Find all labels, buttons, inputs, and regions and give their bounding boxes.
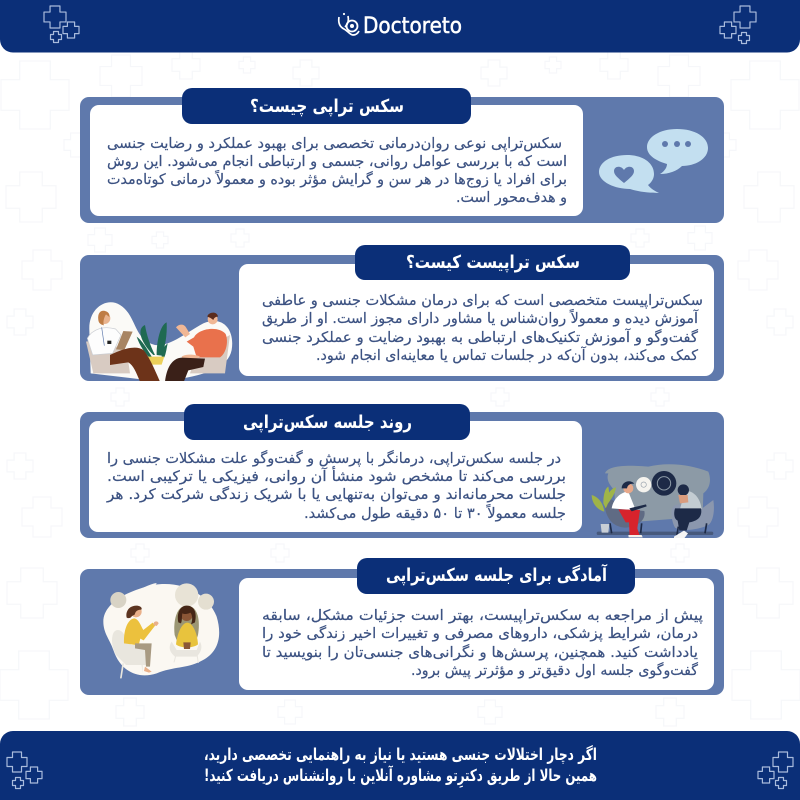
panel 1: what is sex therapy [80, 88, 724, 223]
footer call to action [204, 744, 597, 788]
text card [239, 578, 714, 690]
body text: سکس‌تراپی نوعی روان‌درمانی تخصصی برای بهبود عملکرد و رضایت جنسی [107, 136, 562, 152]
body text: یادداشت کنید. همچنین، پرسش‌ها و نگرانی‌های جنسی‌تان را بنویسید تا [262, 644, 698, 661]
illustration: worried client with therapist [592, 464, 714, 539]
icon: footer crosses left [7, 752, 42, 788]
icon: footer crosses right [758, 752, 793, 788]
body text [107, 136, 567, 206]
body text [262, 608, 703, 679]
icon: header crosses left [44, 6, 79, 42]
body text [262, 293, 703, 364]
body text: پیش از مراجعه به سکس‌تراپیست، بهتر است جزئیات مشکل، سابقه [262, 608, 703, 624]
heading: سکس تراپیست کیست؟ [406, 252, 580, 273]
icon: header crosses right [720, 6, 756, 44]
body text: آموزش دیده و معمولاً روان‌شناس یا مشاور دارای مجوز است. او از طریق [262, 309, 699, 327]
heading pill [357, 558, 635, 594]
body text: است که با بررسی عوامل روانی، جسمی و ارتباطی انجام می‌شود. این روش [107, 154, 567, 170]
heading pill [355, 245, 630, 280]
body text: جلسه معمولاً ۳۰ تا ۵۰ دقیقه طول می‌کشد. [304, 504, 566, 522]
body text: درمان، شرایط پزشکی، داروهای مصرفی و تغییرات اخیر زندگی خود را [262, 625, 698, 642]
heading: آمادگی برای جلسه سکس‌تراپی [386, 563, 608, 586]
footer call to action: اگر دچار اختلالات جنسی هستید یا نیاز به راهنمایی تخصصی دارید، [204, 744, 597, 765]
body text: و هدف‌محور است. [456, 190, 567, 206]
footer call to action: همین حالا از طریق دکترِتو مشاوره آنلاین با روانشناس دریافت کنید! [204, 764, 597, 788]
text card [89, 421, 582, 532]
body text: گفت‌وگو و آموزش تکنیک‌های ارتباطی به بهبود رضایت و عملکرد جنسی [262, 328, 698, 346]
body text: جلسات محرمانه‌اند و می‌توان به‌تنهایی یا با شریک زندگی شرکت کرد. هر [106, 486, 566, 503]
panel 4: preparing for a session [80, 558, 724, 695]
text card [239, 264, 714, 376]
illustration: two women talking [103, 583, 219, 678]
icon: speech bubbles [599, 129, 708, 193]
body text: بررسی می‌کند تا مشخص شود منشأ آن روانی، فیزیکی یا ترکیبی است. [107, 466, 566, 485]
illustration: therapist and client [86, 302, 232, 383]
heading pill [182, 88, 471, 124]
text card [90, 105, 583, 216]
header bar [0, 0, 800, 52]
body text: برای افراد یا زوج‌ها در هر سن و گرایش مؤثر بوده و معمولاً درمانی کوتاه‌مدت [107, 170, 567, 189]
logo: Doctoreto [363, 14, 462, 39]
panel 2: who is a sex therapist [80, 245, 724, 383]
heading: روند جلسه سکس‌تراپی [243, 412, 412, 433]
heading pill [184, 404, 470, 440]
body text [106, 450, 566, 522]
body text: سکس‌تراپیست متخصصی است که برای درمان مشکلات جنسی و عاطفی [262, 293, 703, 309]
footer bar [0, 731, 800, 800]
body text: کمک می‌کند، بدون آن‌که در جلسات تماس یا معاینه‌ای انجام شود. [316, 346, 698, 364]
body text: گفت‌وگوی جلسه اول دقیق‌تر و مؤثرتر پیش برود. [411, 662, 698, 679]
panel 3: session process [80, 404, 724, 539]
heading: سکس تراپی چیست؟ [250, 96, 404, 117]
body text: در جلسه سکس‌تراپی، درمانگر با پرسش و گفت‌وگو علت مشکلات جنسی را [107, 450, 561, 467]
